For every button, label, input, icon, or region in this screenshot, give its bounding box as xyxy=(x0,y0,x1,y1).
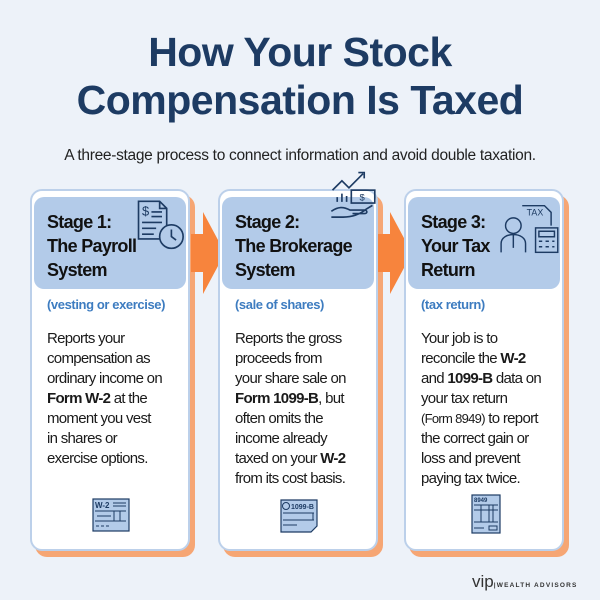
body text: Form W-2 at the xyxy=(47,390,147,407)
body text: exercise options. xyxy=(47,450,148,467)
header: stage 3: Stage 3: xyxy=(421,212,485,232)
title xyxy=(77,29,523,123)
header: stage 2 xyxy=(222,197,374,289)
icon: hand with money and rising chart xyxy=(331,172,376,218)
icon: W-2 form xyxy=(92,498,130,532)
body text xyxy=(235,330,346,487)
body text: taxed on your W-2 xyxy=(235,450,345,467)
body text: proceeds from xyxy=(235,350,322,367)
icon: hand with money and rising chart: $ xyxy=(360,192,366,203)
body text: in shares or xyxy=(47,430,117,447)
body text: reconcile the W-2 xyxy=(421,350,526,367)
body text: ordinary income on xyxy=(47,370,162,387)
icon: 1099-B form xyxy=(280,499,318,533)
title: Compensation Is Taxed xyxy=(77,77,523,123)
header: stage 3: Your Tax xyxy=(421,236,490,256)
body text: and 1099-B data on xyxy=(421,370,541,387)
body text: often omits the xyxy=(235,410,323,427)
header: stage 1 xyxy=(34,197,186,289)
body text: your share sale on xyxy=(235,370,346,387)
body text: from its cost basis. xyxy=(235,470,345,487)
icon: payroll document with clock: $ xyxy=(142,203,149,218)
panel: stage 3 xyxy=(404,189,564,551)
subtitle: A three-stage process to connect information and avoid double taxation. xyxy=(64,147,536,164)
body text: the correct gain or xyxy=(421,430,529,447)
panel: stage 1 xyxy=(30,189,190,551)
tag: vesting or exercise: (vesting or exercise) xyxy=(47,297,165,312)
body text: (Form 8949) to report xyxy=(421,410,538,427)
body text: income already xyxy=(235,430,327,447)
body text: Reports your xyxy=(47,330,124,347)
logo: vip|WEALTH ADVISORS xyxy=(472,572,578,591)
body text: compensation as xyxy=(47,350,150,367)
body text xyxy=(421,330,541,487)
header: stage 2: Stage 2: xyxy=(235,212,299,232)
header: stage 2: System xyxy=(235,260,295,280)
body text xyxy=(47,330,162,467)
icon: person with tax form and calculator: TAX xyxy=(527,208,543,218)
body text: your tax return xyxy=(421,390,507,407)
icon: form 8949: 8949 xyxy=(474,498,488,504)
tag: sale of shares: (sale of shares) xyxy=(235,297,324,312)
body text: Your job is to xyxy=(421,330,497,347)
icon: payroll document with clock xyxy=(138,200,184,250)
panel: stage 2 xyxy=(218,189,378,551)
icon: person with tax form and calculator xyxy=(500,205,558,254)
title: How Your Stock xyxy=(148,29,452,75)
body text: loss and prevent xyxy=(421,450,520,467)
tag: tax return: (tax return) xyxy=(421,297,485,312)
icon: 1099-B form: 1099-B xyxy=(291,504,314,511)
header: stage 3: Return xyxy=(421,260,475,280)
arrow 2 xyxy=(378,212,404,294)
body text: moment you vest xyxy=(47,410,151,427)
body text: Form 1099-B, but xyxy=(235,390,344,407)
icon: form 8949 xyxy=(471,494,501,534)
header: stage 2: The Brokerage xyxy=(235,236,352,256)
arrow 1 xyxy=(191,212,218,294)
header: stage 1: System xyxy=(47,260,107,280)
header: stage 1: Stage 1: xyxy=(47,212,111,232)
body text: paying tax twice. xyxy=(421,470,520,487)
header: stage 3 xyxy=(408,197,560,289)
icon: W-2 form: W-2 xyxy=(95,501,110,510)
body text: Reports the gross xyxy=(235,330,342,347)
header: stage 1: The Payroll xyxy=(47,236,136,256)
